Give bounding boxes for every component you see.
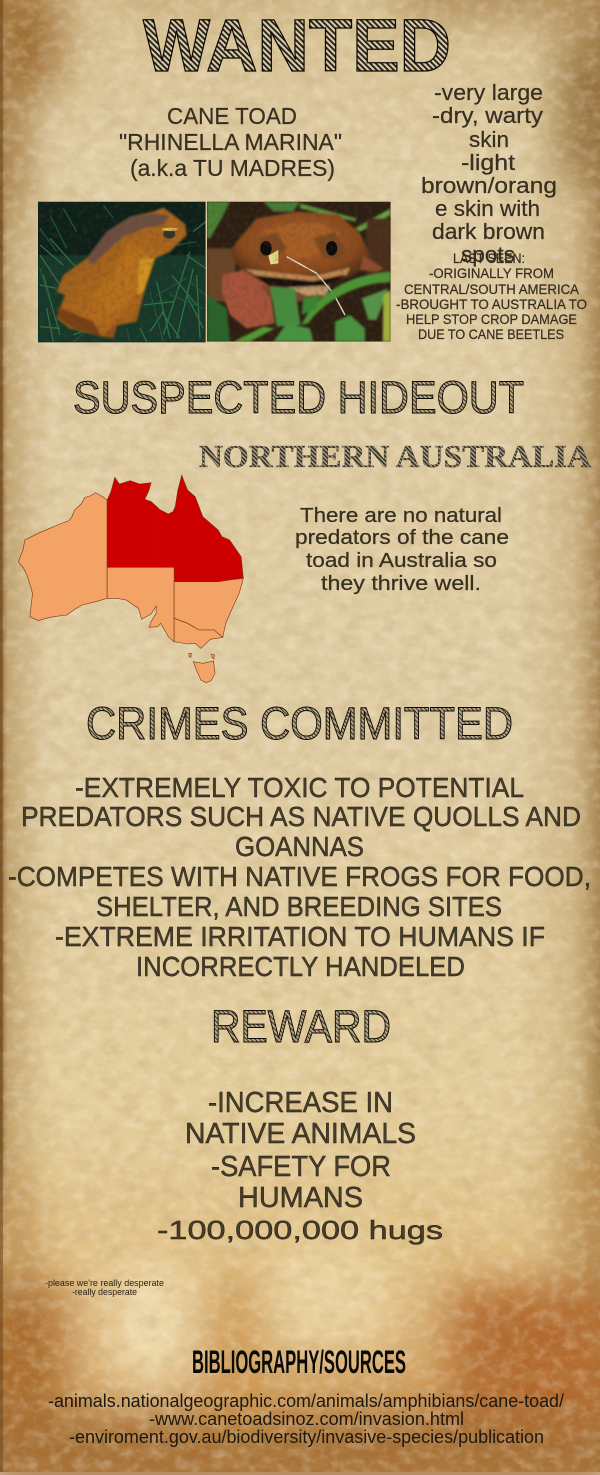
text block: crimes list: GOANNAS	[235, 831, 364, 862]
text block: cane toad name: CANE TOAD	[167, 103, 297, 129]
text block: cane toad name	[119, 103, 342, 181]
text block: last seen: DUE TO CANE BEETLES	[418, 326, 564, 342]
text block: no natural predators: There are no natural	[300, 504, 502, 527]
text block: crimes list	[8, 772, 591, 982]
text block: reward list: -INCREASE IN	[208, 1087, 393, 1119]
text block: source links	[48, 1391, 564, 1447]
text block: crimes list: PREDATORS SUCH AS NATIVE QUOLLS AND	[21, 801, 581, 832]
text block: description	[421, 80, 557, 267]
region: tasmania	[193, 661, 215, 683]
map: australia with northern states highlighted	[18, 475, 243, 683]
region: queensland	[158, 475, 243, 582]
text block: crimes list: SHELTER, AND BREEDING SITES	[96, 891, 502, 922]
text block: description: -dry, warty	[432, 103, 543, 128]
note: please we're really desperate	[45, 1278, 164, 1297]
text block: last seen: -ORIGINALLY FROM	[429, 265, 554, 281]
photo: cane toad front view	[207, 202, 391, 342]
region: south australia	[107, 567, 174, 642]
title: WANTED: WANTED	[143, 4, 451, 87]
text block: description: e skin with	[435, 196, 540, 221]
text block: last seen: -BROUGHT TO AUSTRALIA TO	[396, 296, 587, 312]
text block: last seen	[396, 250, 587, 342]
text block: no natural predators	[295, 504, 509, 595]
text block: source links: -enviroment.gov.au/biodiversity/invasive-species/publication	[69, 1427, 544, 1447]
heading: crimes committed: CRIMES COMMITTED	[86, 698, 513, 749]
text block: crimes list: -EXTREME IRRITATION TO HUMANS IF	[55, 921, 545, 952]
text block: no natural predators: predators of the cane	[295, 526, 509, 549]
photo: cane toad side view	[38, 202, 206, 342]
heading: northern australia: NORTHERN AUSTRALIA	[199, 438, 591, 474]
note: please we're really desperate: -really desperate	[72, 1287, 137, 1297]
heading: bibliography and sources: BIBLIOGRAPHY/SOURCES	[192, 1344, 406, 1380]
text block: last seen: LAST SEEN:	[453, 250, 525, 266]
text block: description: dark brown	[432, 219, 545, 244]
text block: no natural predators: they thrive well.	[321, 572, 481, 595]
text block: last seen: HELP STOP CROP DAMAGE	[406, 311, 577, 327]
text block: description: spots	[461, 242, 515, 267]
text block: last seen: CENTRAL/SOUTH AMERICA	[404, 281, 580, 297]
text block: cane toad name: (a.k.a TU MADRES)	[130, 155, 335, 181]
region: northern territory	[107, 477, 159, 567]
text block: description: -very large	[434, 80, 543, 105]
text block: source links: -animals.nationalgeographic.com/animals/amphibians/cane-toad/	[48, 1391, 564, 1411]
region: victoria	[174, 618, 223, 648]
heading: suspected hideout: SUSPECTED HIDEOUT	[73, 372, 524, 423]
text block: reward list: NATIVE ANIMALS	[185, 1118, 416, 1150]
region: bass strait islands	[189, 653, 214, 659]
text block: reward list: HUMANS	[238, 1182, 363, 1214]
text block: description: skin	[469, 127, 509, 152]
region: new south wales	[174, 578, 243, 637]
text block: reward list: -100,000,000 hugs	[157, 1215, 443, 1245]
text block: no natural predators: toad in Australia so	[306, 549, 497, 572]
text block: description: brown/orang	[421, 173, 557, 198]
heading: reward: REWARD	[211, 1001, 391, 1052]
text block: reward list: -SAFETY FOR	[211, 1151, 391, 1183]
text block: source links: -www.canetoadsinoz.com/invasion.html	[149, 1409, 464, 1429]
text block: crimes list: -EXTREMELY TOXIC TO POTENTIAL	[75, 772, 524, 803]
region: western australia	[18, 493, 107, 621]
note: please we're really desperate: -please we're really desperate	[45, 1278, 164, 1288]
text block: description: -light	[461, 150, 515, 175]
text block: cane toad name: "RHINELLA MARINA"	[119, 129, 342, 155]
text block: crimes list: INCORRECTLY HANDELED	[136, 951, 465, 982]
text block: reward list	[157, 1087, 443, 1245]
